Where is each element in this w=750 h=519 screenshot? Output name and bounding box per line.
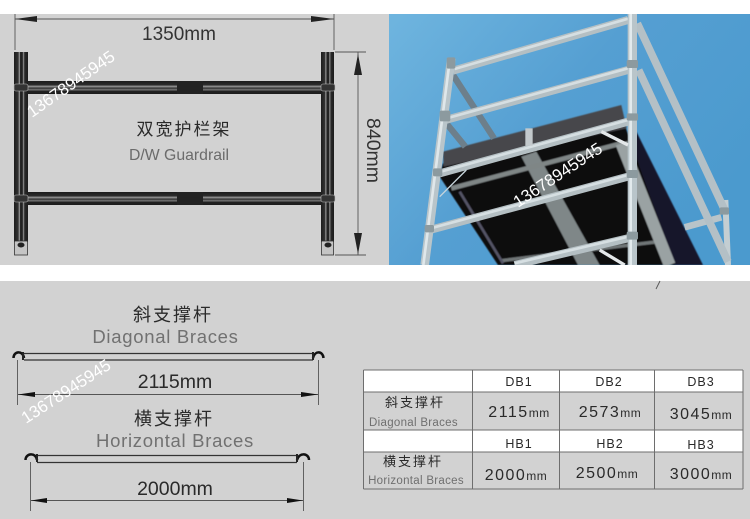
size values: 2000mm <box>485 467 547 484</box>
guardrail english title: D/W Guardrail <box>129 147 229 164</box>
size values: 3045mm <box>670 406 732 423</box>
horizontal row label: 横支撑杆 <box>383 454 443 469</box>
size values <box>485 404 732 484</box>
horizontal brace chinese title: 横支撑杆 <box>134 409 214 429</box>
model codes: HB2 <box>596 437 624 451</box>
watermark: 13678945945 <box>18 356 114 427</box>
diagonal brace english title: Diagonal Braces <box>92 326 239 347</box>
model codes: HB1 <box>505 437 533 451</box>
width dimension arrow <box>15 14 334 50</box>
model codes: HB3 <box>687 438 715 452</box>
height dimension arrow <box>335 52 366 255</box>
diagonal brace chinese title: 斜支撑杆 <box>133 305 213 325</box>
watermark: 13678945945 <box>510 139 606 211</box>
panel: braces and size table <box>0 281 750 519</box>
guardrail frame <box>14 52 335 255</box>
horizontal row label <box>368 454 464 487</box>
horizontal brace length: 2000mm <box>137 478 213 500</box>
couplers <box>425 57 729 240</box>
watermark: 13678945945 <box>23 47 118 121</box>
model codes: DB2 <box>595 375 623 389</box>
horizontal brace dimension arrow <box>30 462 304 511</box>
diagonal row label: Diagonal Braces <box>369 417 458 429</box>
diagonal row label: 斜支撑杆 <box>385 395 445 410</box>
size table <box>363 370 743 489</box>
diagonal brace length: 2115mm <box>138 371 212 393</box>
guardrail chinese title: 双宽护栏架 <box>136 120 232 139</box>
width label: 1350mm <box>142 24 216 45</box>
scaffold tubes <box>423 14 728 265</box>
sky <box>389 14 613 265</box>
horizontal brace drawing <box>26 454 309 462</box>
horizontal brace english title: Horizontal Braces <box>96 430 254 451</box>
panel: scaffold photo <box>388 14 750 265</box>
small tick mark <box>656 281 660 289</box>
diagonal row label <box>369 395 458 429</box>
panel: guardrail diagram <box>0 14 389 265</box>
model codes <box>505 375 715 452</box>
size values: 2115mm <box>488 404 550 421</box>
diagonal brace dimension arrow <box>18 360 318 405</box>
model codes: DB3 <box>687 375 715 389</box>
diagonal brace drawing <box>14 352 324 360</box>
scaffold platform <box>440 105 703 265</box>
size values: 2500mm <box>576 465 638 482</box>
size values: 3000mm <box>670 466 732 483</box>
model codes: DB1 <box>505 375 533 389</box>
horizontal row label: Horizontal Braces <box>368 475 464 487</box>
size values: 2573mm <box>579 404 641 421</box>
height label: 840mm <box>362 118 384 183</box>
